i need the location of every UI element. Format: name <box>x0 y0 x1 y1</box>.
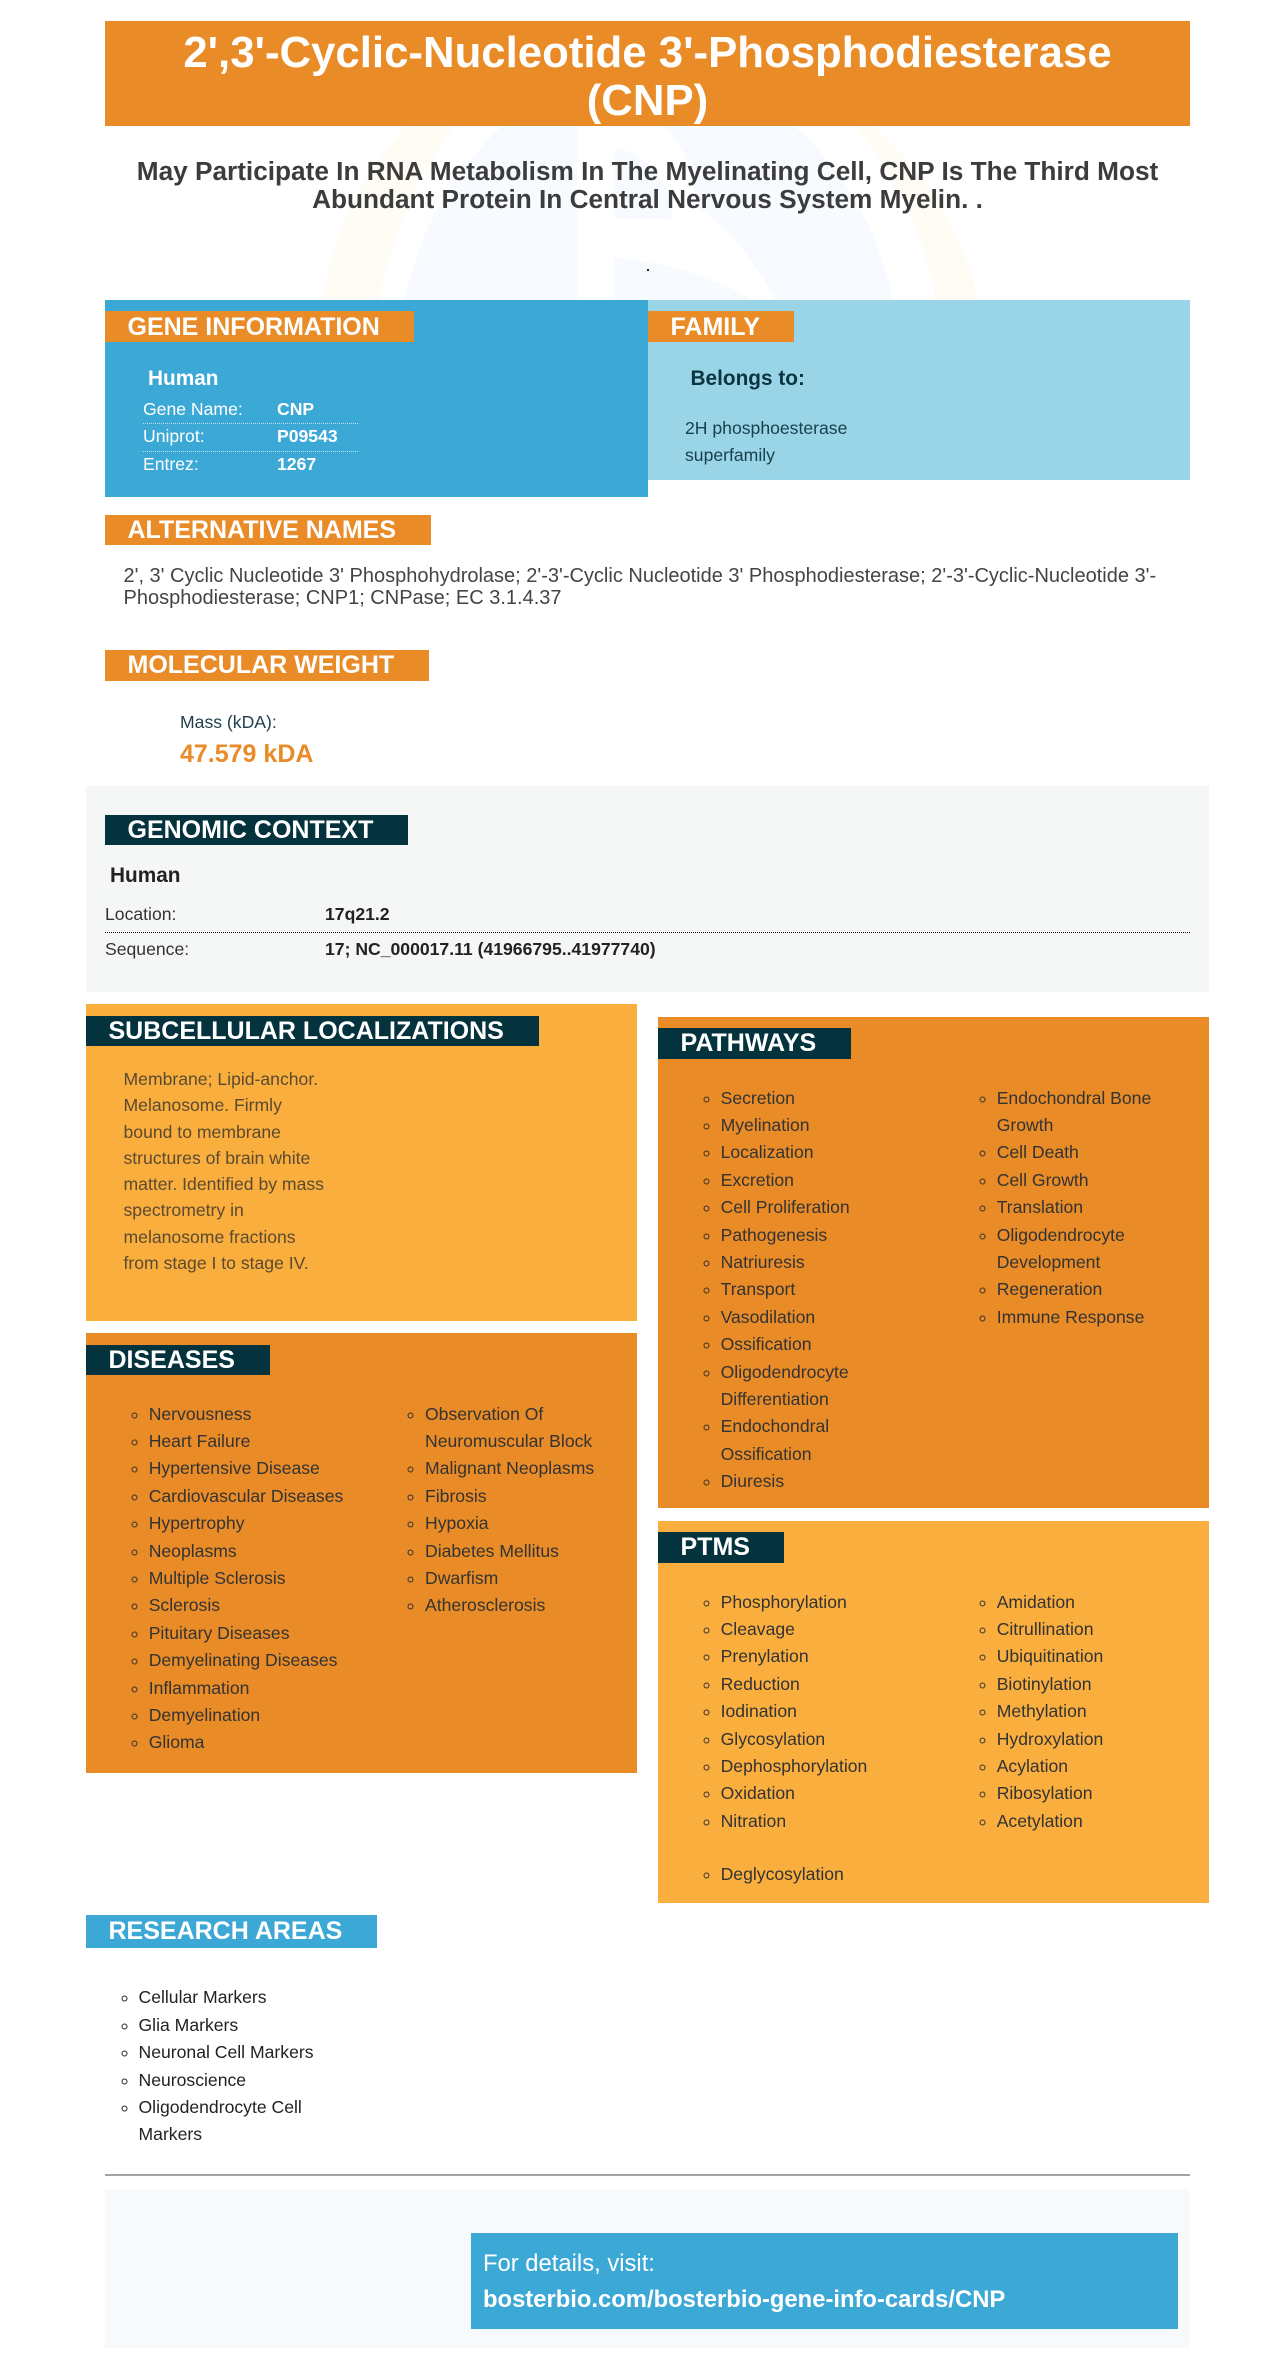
subtitle: May Participate In RNA Metabolism In The Myelinating Cell, CNP Is The Third Most <box>137 156 1158 186</box>
uniprot row <box>143 423 358 452</box>
species label: Human <box>148 367 218 390</box>
heading: research areas: RESEARCH AREAS <box>108 1917 342 1945</box>
ptms list column 2: Acetylation <box>997 1811 1083 1831</box>
heading: diseases <box>86 1345 270 1375</box>
pathways list column 2: Growth <box>997 1115 1053 1135</box>
ptms list column 2: Hydroxylation <box>997 1729 1103 1749</box>
ptms list column 2: Ubiquitination <box>997 1646 1103 1666</box>
diseases list column 1: Demyelinating Diseases <box>149 1650 337 1670</box>
belongs to label: Belongs to: <box>690 367 805 390</box>
localization text: melanosome fractions <box>124 1227 296 1247</box>
pathways list column 2: Cell Growth <box>997 1170 1089 1190</box>
diseases list column 1: Heart Failure <box>149 1431 250 1451</box>
uniprot row: Uniprot: <box>143 426 205 446</box>
ptms list column 2: Biotinylation <box>997 1674 1092 1694</box>
pathways list column 1: Excretion <box>721 1170 794 1190</box>
heading: family <box>648 310 794 342</box>
panel: genomic context: 17; NC_000017.11 (41966795..41977740) <box>325 938 656 958</box>
diseases list column 1: Hypertrophy <box>149 1513 245 1533</box>
diseases list column 1: Inflammation <box>149 1678 249 1698</box>
heading: gene information: GENE INFORMATION <box>128 312 380 340</box>
localization text <box>124 1069 324 1273</box>
panel: family <box>648 300 1190 480</box>
panel: ptms <box>658 1521 1209 1903</box>
diseases list column 2 <box>408 1404 594 1615</box>
panel: gene information <box>105 300 648 497</box>
family text: superfamily <box>685 444 775 464</box>
pathways list column 1: Oligodendrocyte <box>721 1362 849 1382</box>
ptms list column 1 <box>704 1592 867 1884</box>
heading: alternative names: ALTERNATIVE NAMES <box>128 516 396 544</box>
heading: ptms: PTMS <box>680 1533 750 1561</box>
pathways list column 2: Endochondral Bone <box>997 1088 1151 1108</box>
panel: gene information: 1267 <box>277 454 316 474</box>
ptms list column 2: Methylation <box>997 1701 1087 1721</box>
heading: molecular weight: MOLECULAR WEIGHT <box>128 651 394 679</box>
pathways list column 2: Translation <box>997 1197 1083 1217</box>
research areas list: Markers <box>138 2124 202 2144</box>
ptms list column 1: Dephosphorylation <box>721 1756 867 1776</box>
diseases list column 2: Diabetes Mellitus <box>425 1541 559 1561</box>
title <box>105 21 1190 126</box>
research areas list <box>122 1987 314 2144</box>
localization text: structures of brain white <box>124 1148 310 1168</box>
alternative names text <box>124 565 1156 609</box>
ptms list column 1: Reduction <box>721 1674 800 1694</box>
location row <box>105 904 390 924</box>
ptms list column 1: Iodination <box>721 1701 797 1721</box>
pathways list column 1: Localization <box>721 1142 814 1162</box>
species label: Human <box>110 864 180 886</box>
pathways list column 1: Cell Proliferation <box>721 1197 850 1217</box>
subtitle <box>137 156 1158 214</box>
heading: family: FAMILY <box>670 312 760 340</box>
diseases list column 1: Hypertensive Disease <box>149 1458 320 1478</box>
diseases list column 1: Pituitary Diseases <box>149 1623 290 1643</box>
pathways list column 2: Development <box>997 1252 1100 1272</box>
details label: For details, visit: <box>483 2250 655 2276</box>
diseases list column 1: Glioma <box>149 1732 204 1752</box>
diseases list column 2: Dwarfism <box>425 1568 498 1588</box>
ptms list column 1: Glycosylation <box>721 1729 825 1749</box>
localization text: spectrometry in <box>124 1200 244 1220</box>
pathways list column 2: Immune Response <box>997 1307 1144 1327</box>
sequence row: Sequence: <box>105 938 189 958</box>
heading: diseases: DISEASES <box>108 1346 235 1374</box>
ptms list column 1: Oxidation <box>721 1783 795 1803</box>
pathways list column 1: Diuresis <box>721 1471 784 1491</box>
dotted divider <box>105 932 1190 933</box>
pathways list column 1: Transport <box>721 1279 795 1299</box>
ptms list column 1: Phosphorylation <box>721 1592 847 1612</box>
entrez row: Entrez: <box>143 454 199 474</box>
diseases list column 2: Fibrosis <box>425 1486 487 1506</box>
panel: subcellular localizations <box>86 1004 637 1321</box>
research areas list: Neuroscience <box>138 2070 246 2090</box>
pathways list column 1: Ossification <box>721 1334 812 1354</box>
ptms list column 2: Amidation <box>997 1592 1075 1612</box>
heading: pathways <box>658 1028 851 1059</box>
pathways list column 1: Myelination <box>721 1115 810 1135</box>
dot <box>647 269 649 271</box>
heading: genomic context: GENOMIC CONTEXT <box>128 816 373 844</box>
diseases list column 1: Nervousness <box>149 1404 251 1424</box>
localization text: matter. Identified by mass <box>124 1174 324 1194</box>
ptms list column 2: Citrullination <box>997 1619 1094 1639</box>
ptms list column 1: Prenylation <box>721 1646 809 1666</box>
family text: 2H phosphoesterase <box>685 418 847 438</box>
pathways list column 1: Natriuresis <box>721 1252 805 1272</box>
diseases list column 2: Observation Of <box>425 1404 543 1424</box>
pathways list column 1: Differentiation <box>721 1389 829 1409</box>
pathways list column 2: Oligodendrocyte <box>997 1225 1125 1245</box>
pathways list column 2: Cell Death <box>997 1142 1079 1162</box>
alternative names text: Phosphodiesterase; CNP1; CNPase; EC 3.1.4.37 <box>124 587 562 609</box>
pathways list column 1: Endochondral <box>721 1416 829 1436</box>
ptms list column 1: Nitration <box>721 1811 786 1831</box>
research areas list: Oligodendrocyte Cell <box>138 2097 302 2117</box>
family text <box>685 418 847 464</box>
mass label: Mass (kDA): <box>180 712 277 732</box>
ptms list column 1: Cleavage <box>721 1619 795 1639</box>
panel: pathways <box>658 1017 1209 1508</box>
localization text: Membrane; Lipid-anchor. <box>124 1069 318 1089</box>
pathways list column 2 <box>980 1088 1151 1327</box>
gene name row: CNP <box>277 399 314 419</box>
research areas list: Glia Markers <box>138 2015 238 2035</box>
pathways list column 1 <box>704 1088 850 1491</box>
diseases list column 1 <box>132 1404 343 1752</box>
pathways list column 1: Vasodilation <box>721 1307 815 1327</box>
diseases list column 1: Demyelination <box>149 1705 260 1725</box>
diseases list column 1: Neoplasms <box>149 1541 237 1561</box>
diseases list column 1: Sclerosis <box>149 1595 220 1615</box>
ptms list column 2 <box>980 1592 1103 1831</box>
watermark logo <box>322 126 978 300</box>
research areas list: Cellular Markers <box>138 1987 267 2007</box>
research areas list: Neuronal Cell Markers <box>138 2042 314 2062</box>
heading: pathways: PATHWAYS <box>680 1029 816 1057</box>
entrez row <box>143 454 316 474</box>
ptms list column 2: Ribosylation <box>997 1783 1093 1803</box>
title: (CNP) <box>587 76 708 124</box>
pathways list column 1: Ossification <box>721 1444 812 1464</box>
diseases list column 1: Cardiovascular Diseases <box>149 1486 343 1506</box>
diseases list column 1: Multiple Sclerosis <box>149 1568 286 1588</box>
heading: ptms <box>658 1532 784 1563</box>
callout: details link <box>471 2233 1178 2329</box>
localization text: from stage I to stage IV. <box>124 1253 309 1273</box>
diseases list column 2: Neuromuscular Block <box>425 1431 592 1451</box>
diseases list column 2: Malignant Neoplasms <box>425 1458 594 1478</box>
heading: research areas <box>86 1915 377 1948</box>
diseases list column 2: Atherosclerosis <box>425 1595 545 1615</box>
gene name row <box>143 396 358 424</box>
details url: bosterbio.com/bosterbio-gene-info-cards/CNP <box>483 2286 1005 2313</box>
ptms list column 1: Deglycosylation <box>721 1864 844 1884</box>
panel: genomic context: 17q21.2 <box>325 904 390 924</box>
diseases list column 2: Hypoxia <box>425 1513 489 1533</box>
pathways list column 1: Pathogenesis <box>721 1225 827 1245</box>
panel: diseases <box>86 1333 637 1773</box>
localization text: bound to membrane <box>124 1122 281 1142</box>
ptms list column 2: Acylation <box>997 1756 1068 1776</box>
heading: subcellular localizations: SUBCELLULAR LOCALIZATIONS <box>108 1017 504 1045</box>
title: 2',3'-Cyclic-Nucleotide 3'-Phosphodiesterase <box>183 28 1112 76</box>
alternative names text: 2', 3' Cyclic Nucleotide 3' Phosphohydrolase; 2'-3'-Cyclic Nucleotide 3' Phosphodiesterase; 2'-3'-Cyclic-Nucleotide 3'- <box>124 565 1156 587</box>
divider line <box>105 2174 1190 2176</box>
localization text: Melanosome. Firmly <box>124 1095 282 1115</box>
location row: Location: <box>105 904 176 924</box>
pathways list column 2: Regeneration <box>997 1279 1102 1299</box>
subtitle: Abundant Protein In Central Nervous System Myelin. . <box>312 184 983 214</box>
panel: genomic context <box>86 786 1209 992</box>
uniprot row: P09543 <box>277 426 338 446</box>
sequence row <box>105 938 656 958</box>
mass value: 47.579 kDA <box>180 740 313 768</box>
pathways list column 1: Secretion <box>721 1088 795 1108</box>
panel: footer <box>105 2189 1190 2348</box>
gene name row: Gene Name: <box>143 399 243 419</box>
